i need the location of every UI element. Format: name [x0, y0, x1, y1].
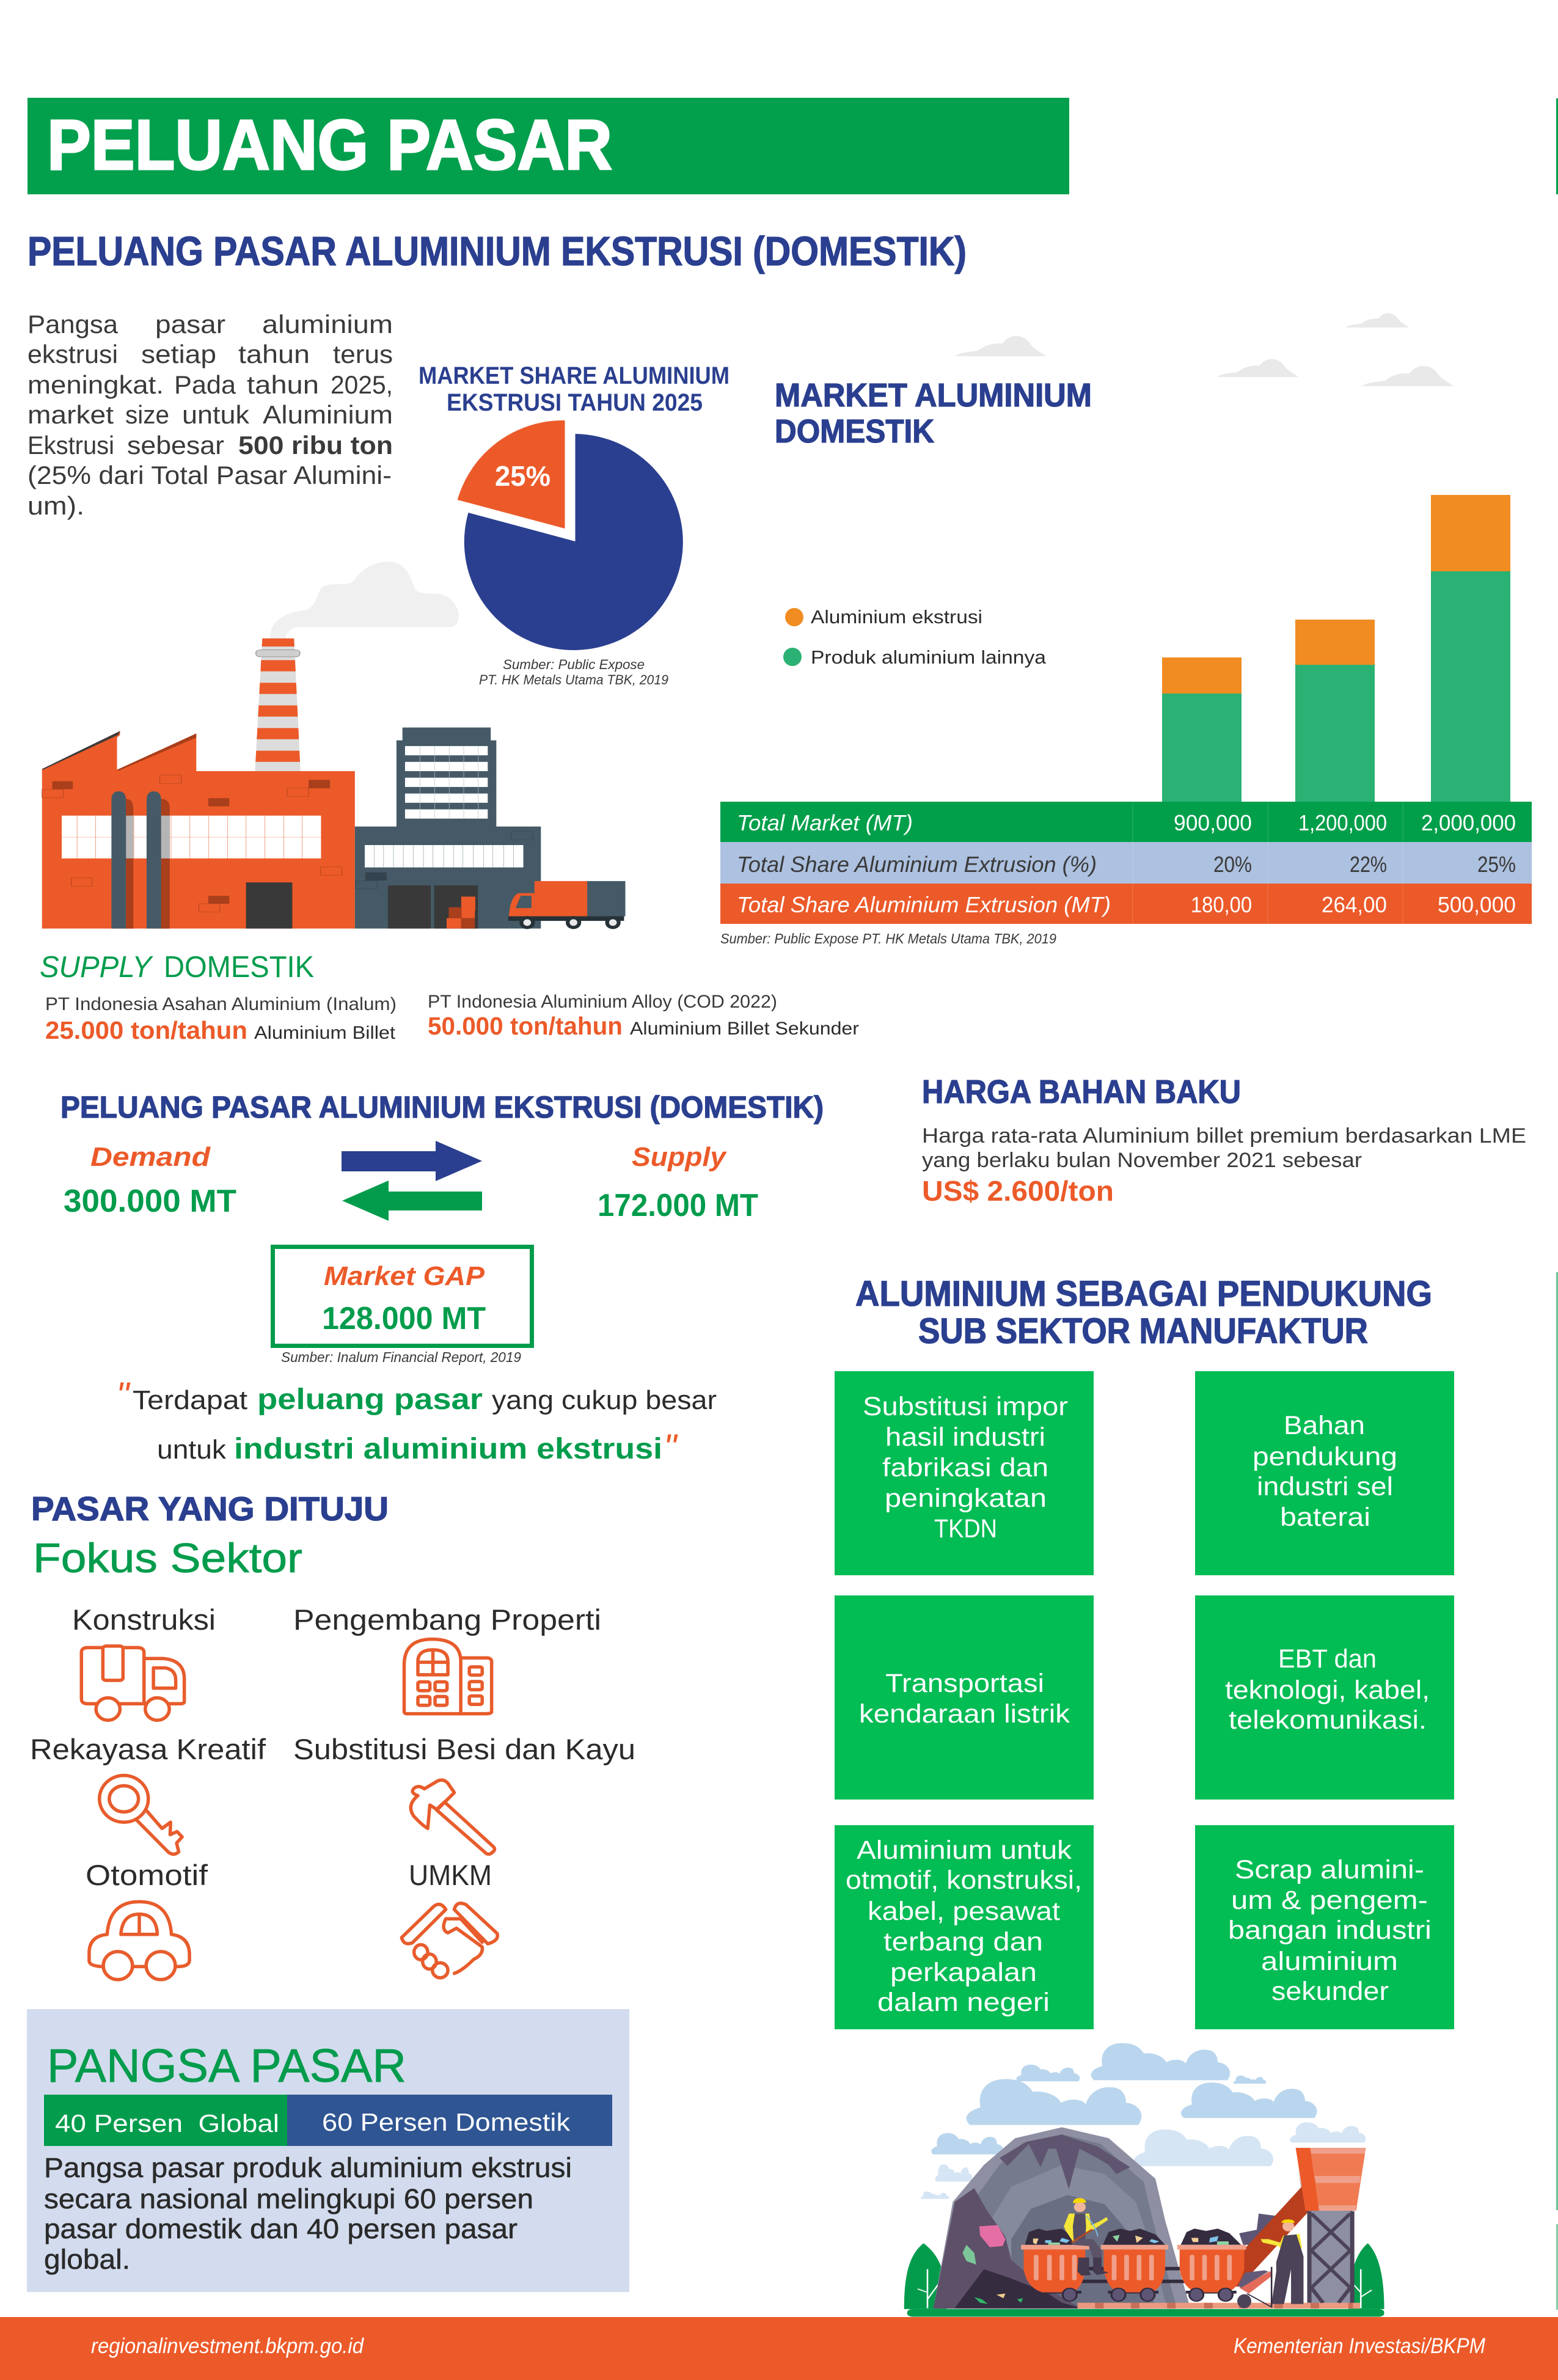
intro paragraph: pasar — [155, 310, 225, 339]
card: EBT — [1195, 1595, 1454, 1800]
chart legend: Produk aluminium lainnya — [811, 646, 1047, 668]
market data table: 180,00 — [1191, 892, 1252, 917]
supply domestik: PT Indonesia Aluminium Alloy (COD 2022) — [428, 992, 777, 1012]
icon: handshake — [401, 1903, 497, 1978]
raw material price: yang berlaku bulan November 2021 sebesar — [922, 1149, 1362, 1172]
pangsa pasar description: global. — [44, 2244, 130, 2275]
card: aluminium untuk otomotif: dalam negeri — [877, 1988, 1050, 2017]
heading: market aluminium domestik: DOMESTIK — [775, 413, 934, 450]
supply domestik — [40, 951, 859, 1044]
title banner: PELUANG PASAR — [47, 105, 612, 185]
share bar: 40 Persen Global — [55, 2109, 279, 2137]
illustration: mine with carts and miners — [904, 2043, 1384, 2316]
card: substitusi impor: peningkatan — [885, 1484, 1047, 1513]
market data table: Total Market (MT) — [737, 810, 913, 835]
quote: untuk — [157, 1435, 227, 1465]
intro paragraph: Ekstrusi — [27, 431, 114, 460]
section heading: domestic market opportunity: PELUANG PASAR ALUMINIUM EKSTRUSI (DOMESTIK) — [27, 229, 967, 274]
chart legend: Aluminium ekstrusi — [811, 606, 982, 628]
intro paragraph: 500 ribu ton — [238, 431, 393, 460]
footer bar — [0, 2317, 1558, 2380]
icon: hammer — [411, 1780, 495, 1854]
market gap box: Market GAP — [324, 1261, 485, 1291]
intro paragraph: size — [125, 400, 169, 429]
supply figure: Supply — [632, 1142, 728, 1172]
panel: pangsa pasar — [27, 2009, 629, 2292]
heading: demand and supply: PELUANG PASAR ALUMINIUM EKSTRUSI (DOMESTIK) — [60, 1090, 824, 1124]
card: substitusi impor — [835, 1371, 1094, 1575]
pangsa pasar description — [44, 2152, 572, 2275]
card: substitusi impor: hasil industri — [885, 1423, 1045, 1452]
pangsa pasar description: secara nasional melingkupi 60 persen — [44, 2183, 533, 2214]
share bar: 60 Persen Domestik — [322, 2108, 571, 2136]
card: bahan pendukung — [1195, 1371, 1454, 1575]
pie chart: market share 2025: PT. HK Metals Utama TBK, 2019 — [479, 672, 668, 687]
icon: key — [100, 1776, 182, 1854]
quote: " — [116, 1375, 131, 1416]
sector labels — [30, 1603, 635, 1891]
sector labels: Rekayasa Kreatif — [30, 1733, 266, 1765]
market gap box: Sumber: Inalum Financial Report, 2019 — [281, 1349, 521, 1365]
intro paragraph: Pada — [174, 370, 236, 399]
illustration: factory and truck — [42, 562, 625, 929]
quote: industri aluminium ekstrusi — [234, 1433, 662, 1465]
title banner — [27, 98, 1069, 194]
market data table: 500,000 — [1438, 892, 1516, 917]
icon: car — [89, 1902, 189, 1980]
card: aluminium untuk otomotif: terbang dan — [883, 1927, 1043, 1957]
raw material price: HARGA BAHAN BAKU — [922, 1074, 1241, 1110]
card: EBT: EBT dan — [1278, 1644, 1377, 1674]
card: scrap aluminium: bangan industri — [1228, 1916, 1432, 1945]
raw material price: US$ 2.600/ton — [922, 1175, 1114, 1207]
card: aluminium untuk otomotif: kabel, pesawat — [868, 1897, 1060, 1926]
pie chart: market share 2025: MARKET SHARE ALUMINIUM — [419, 362, 730, 389]
card: scrap aluminium: um & pengem- — [1231, 1886, 1428, 1915]
card: aluminium untuk otomotif — [835, 1825, 1094, 2029]
card: transportasi: Transportasi — [885, 1669, 1044, 1698]
intro paragraph: 2025, — [331, 370, 393, 399]
heading: sub sektor manufaktur — [855, 1274, 1432, 1351]
icon: building — [404, 1639, 492, 1714]
footer bar: regionalinvestment.bkpm.go.id — [91, 2334, 364, 2358]
sector labels: UMKM — [409, 1859, 492, 1891]
card: scrap aluminium: sekunder — [1271, 1977, 1389, 2006]
demand figure: Demand — [90, 1142, 211, 1172]
pie chart: market share 2025: EKSTRUSI TAHUN 2025 — [447, 389, 703, 416]
intro paragraph: tahun — [238, 340, 310, 368]
supply domestik: DOMESTIK — [164, 951, 314, 984]
intro paragraph: Pangsa — [27, 310, 119, 339]
market data table: 2,000,000 — [1421, 810, 1516, 835]
heading: market aluminium domestik: MARKET ALUMINIUM — [775, 377, 1092, 414]
supply figure: 172.000 MT — [598, 1188, 758, 1223]
market data table: 25% — [1477, 852, 1516, 877]
card: bahan pendukung: industri sel — [1257, 1472, 1393, 1501]
footer bar: Kementerian Investasi/BKPM — [1234, 2334, 1486, 2358]
card: substitusi impor: TKDN — [934, 1514, 997, 1543]
quote: peluang pasar — [257, 1383, 483, 1416]
quote: yang cukup besar — [492, 1385, 717, 1415]
sector labels: Substitusi Besi dan Kayu — [293, 1733, 635, 1765]
heading: pasar yang dituju: PASAR YANG DITUJU — [31, 1490, 389, 1528]
intro paragraph: (25% dari Total Pasar Alumini- — [27, 461, 392, 489]
arrow: demand to supply — [342, 1141, 482, 1181]
supply domestik: PT Indonesia Asahan Aluminium (Inalum) — [45, 994, 397, 1014]
icon: truck — [81, 1646, 185, 1720]
intro paragraph: Aluminium — [263, 400, 393, 429]
intro paragraph: ekstrusi — [27, 340, 118, 368]
card: bahan pendukung: Bahan — [1284, 1411, 1365, 1440]
card: aluminium untuk otomotif: perkapalan — [890, 1958, 1037, 1987]
demand figure: 300.000 MT — [64, 1184, 236, 1219]
quote: " — [664, 1427, 678, 1468]
pangsa pasar description: Pangsa pasar produk aluminium ekstrusi — [44, 2152, 572, 2183]
heading: market aluminium domestik — [775, 377, 1092, 450]
intro paragraph: meningkat. — [27, 370, 164, 399]
market data table: 264,00 — [1322, 892, 1387, 917]
pie chart: market share 2025: Sumber: Public Expose — [503, 657, 645, 672]
card: bahan pendukung: pendukung — [1253, 1442, 1397, 1471]
intro paragraph: aluminium — [262, 310, 393, 339]
card: EBT: telekomunikasi. — [1229, 1705, 1427, 1735]
card: aluminium untuk otomotif: Aluminium untuk — [857, 1836, 1072, 1865]
market gap box: 128.000 MT — [322, 1301, 486, 1336]
quote: Terdapat — [133, 1385, 247, 1415]
raw material price — [922, 1074, 1526, 1207]
intro paragraph: setiap — [141, 340, 216, 368]
share bar — [44, 2095, 612, 2146]
intro paragraph: terus — [333, 340, 393, 368]
market data table: 1,200,000 — [1298, 810, 1387, 835]
supply domestik: SUPPLY — [40, 951, 153, 984]
sector labels: Otomotif — [86, 1859, 208, 1891]
market data table: 900,000 — [1174, 810, 1252, 835]
pie chart: market share 2025: 25% — [495, 460, 550, 492]
raw material price: Harga rata-rata Aluminium billet premium berdasarkan LME — [922, 1124, 1526, 1148]
card: transportasi — [835, 1595, 1094, 1800]
heading: sub sektor manufaktur: ALUMINIUM SEBAGAI PENDUKUNG — [855, 1274, 1432, 1314]
intro paragraph: market — [27, 400, 114, 429]
right edge strips — [1556, 98, 1558, 2310]
pangsa pasar description: pasar domestik dan 40 persen pasar — [44, 2213, 518, 2244]
panel: pangsa pasar: PANGSA PASAR — [47, 2040, 406, 2092]
supply domestik: Aluminium Billet — [254, 1023, 396, 1043]
market data table: Total Share Aluminium Extrusion (%) — [737, 852, 1097, 877]
intro paragraph — [27, 310, 393, 520]
card: EBT: teknologi, kabel, — [1225, 1675, 1430, 1705]
decorative clouds top right — [955, 313, 1454, 386]
stacked bar chart — [1162, 495, 1510, 802]
market data table: Sumber: Public Expose PT. HK Metals Utama TBK, 2019 — [720, 931, 1056, 947]
card: scrap aluminium: aluminium — [1261, 1947, 1398, 1976]
card: scrap aluminium — [1195, 1825, 1454, 2029]
card: substitusi impor: fabrikasi dan — [882, 1453, 1048, 1482]
intro paragraph: tahun — [247, 370, 319, 399]
chart legend — [783, 606, 1047, 668]
arrow: supply to demand — [342, 1181, 482, 1221]
supply figure — [598, 1142, 758, 1223]
market data table: Total Share Aluminium Extrusion (MT) — [737, 892, 1111, 917]
market gap box — [272, 1247, 532, 1365]
supply domestik: 50.000 ton/tahun — [428, 1012, 623, 1040]
card: aluminium untuk otomotif: otmotif, konstruksi, — [846, 1866, 1082, 1895]
sector labels: Pengembang Properti — [293, 1603, 601, 1636]
sector labels: Konstruksi — [72, 1603, 216, 1636]
supply domestik: 25.000 ton/tahun — [45, 1016, 247, 1044]
market data table: 22% — [1350, 852, 1387, 877]
card: bahan pendukung: baterai — [1280, 1503, 1370, 1532]
card: scrap aluminium: Scrap alumini- — [1235, 1855, 1424, 1884]
pie chart: market share 2025 — [419, 362, 730, 687]
intro paragraph: sebesar — [127, 431, 224, 460]
card: transportasi: kendaraan listrik — [859, 1699, 1070, 1729]
intro paragraph: um). — [27, 491, 84, 520]
card: substitusi impor: Substitusi impor — [863, 1392, 1068, 1421]
market data table: 20% — [1213, 852, 1252, 877]
supply domestik: Aluminium Billet Sekunder — [630, 1019, 859, 1039]
heading: sub sektor manufaktur: SUB SEKTOR MANUFAKTUR — [918, 1311, 1368, 1351]
intro paragraph: untuk — [182, 400, 250, 429]
market data table — [720, 802, 1532, 947]
demand figure — [64, 1142, 236, 1219]
heading: fokus sektor: Fokus Sektor — [33, 1535, 302, 1581]
quote — [116, 1375, 717, 1468]
